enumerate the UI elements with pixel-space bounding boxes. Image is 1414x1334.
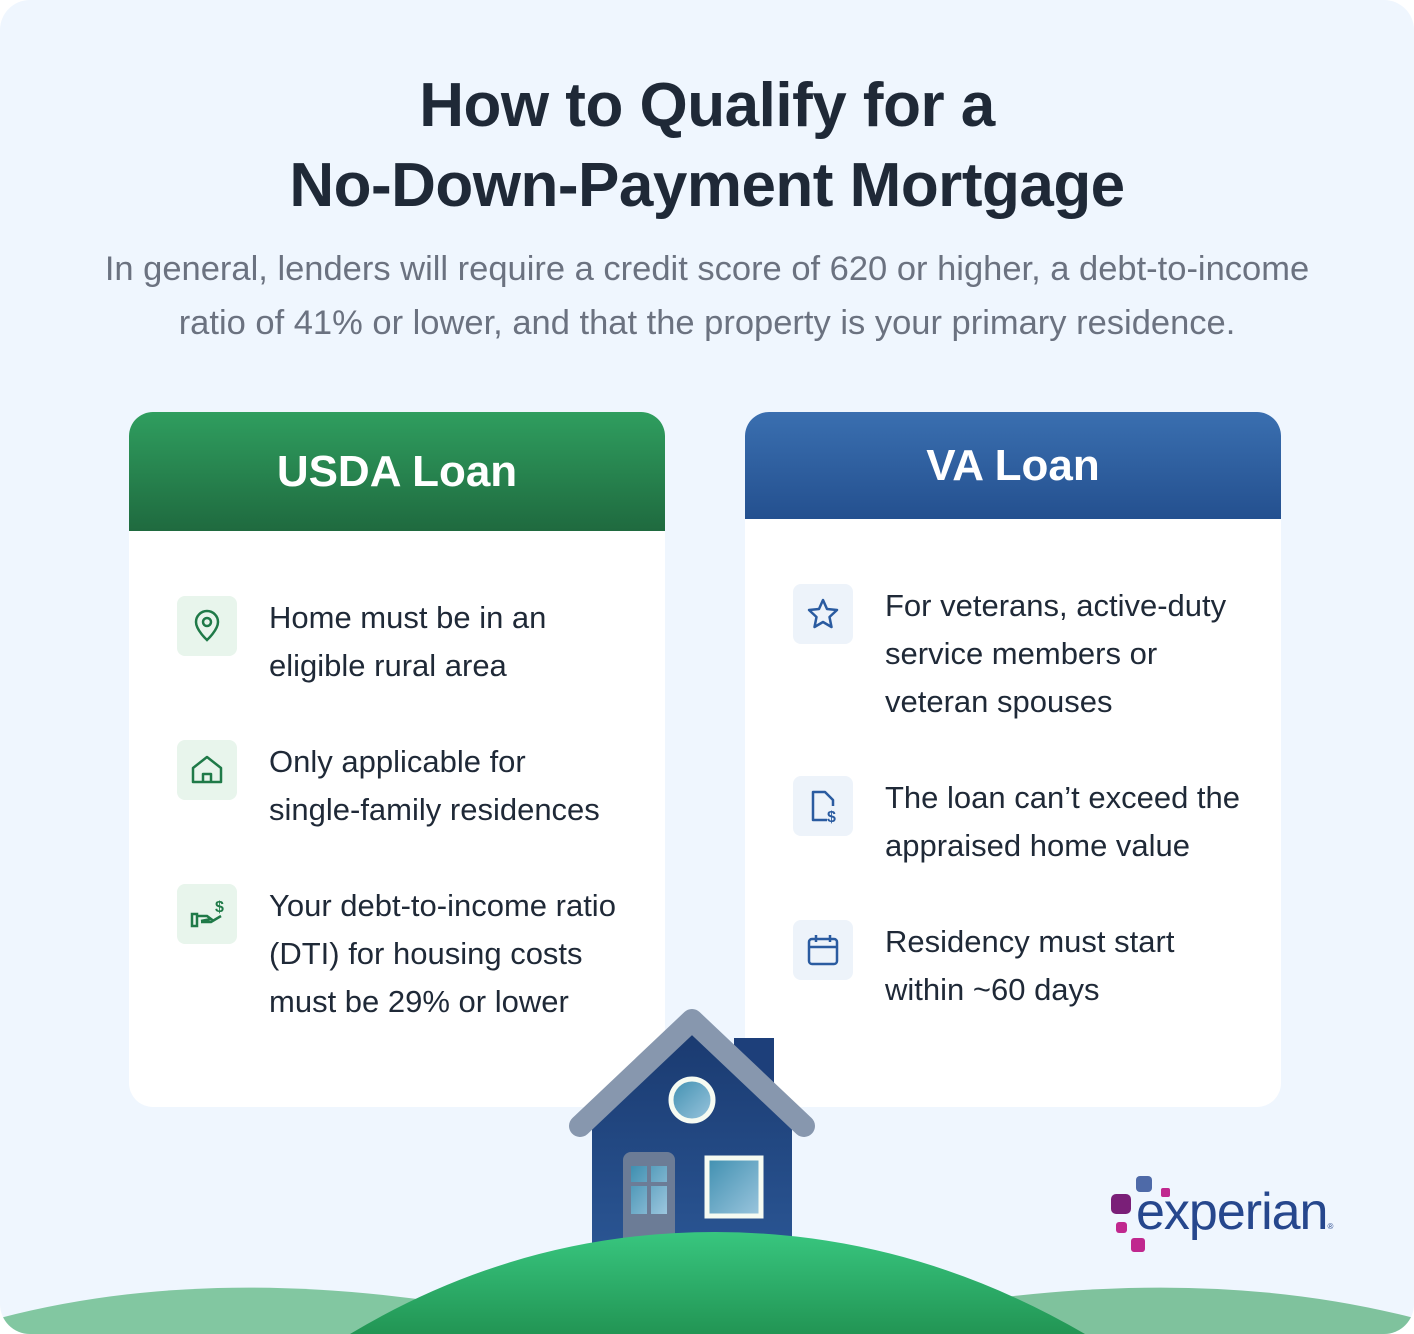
item: rural area: Home must be in an <box>269 600 546 635</box>
panel: VA loan <box>745 412 1281 1107</box>
icon: star <box>793 584 853 644</box>
icon: calendar <box>793 920 853 980</box>
icon: location pin <box>177 596 237 656</box>
icon: document dollar: $ <box>827 809 836 826</box>
item: appraised value <box>793 776 1240 863</box>
heading: USDA Loan: USDA Loan <box>277 447 517 496</box>
item: DTI: Your debt-to-income ratio <box>269 888 616 923</box>
item: veterans: service members or <box>885 636 1157 671</box>
logo: experian <box>1111 1176 1334 1252</box>
house <box>580 1020 804 1252</box>
item: single family <box>177 740 600 827</box>
item: single family: single-family residences <box>269 792 600 827</box>
item: residency <box>793 920 1174 1007</box>
item: rural area: eligible rural area <box>269 648 507 683</box>
item: veterans: veteran spouses <box>885 684 1112 719</box>
subtitle: In general, lenders will require a credit score of 620 or higher, a debt-to-income <box>105 250 1309 288</box>
title <box>289 71 1125 220</box>
item: appraised value: appraised home value <box>885 828 1190 863</box>
main hill <box>350 1232 1085 1334</box>
item: appraised value: The loan can’t exceed the <box>885 780 1240 815</box>
item: veterans <box>793 584 1226 719</box>
item: veterans: For veterans, active-duty <box>885 588 1226 623</box>
subtitle: ratio of 41% or lower, and that the property is your primary residence. <box>179 304 1235 342</box>
heading: VA Loan <box>745 412 1281 519</box>
item: rural area <box>177 596 546 683</box>
subtitle <box>105 250 1309 342</box>
heading: VA Loan: VA Loan <box>926 441 1100 490</box>
panel: USDA loan <box>129 412 665 1107</box>
item: single family: Only applicable for <box>269 744 526 779</box>
side hills <box>0 1288 600 1334</box>
icon: house <box>177 740 237 800</box>
item: DTI: (DTI) for housing costs <box>269 936 583 971</box>
icon: hand with dollar <box>177 884 237 944</box>
item: residency: within ~60 days <box>885 972 1100 1007</box>
heading: USDA Loan <box>129 412 665 531</box>
item: DTI: must be 29% or lower <box>269 984 569 1019</box>
logo: experian: experian® <box>1136 1183 1332 1241</box>
item: DTI <box>177 884 616 1019</box>
icon: document dollar <box>793 776 853 836</box>
item: residency: Residency must start <box>885 924 1174 959</box>
icon: hand with dollar: $ <box>215 899 224 916</box>
title: How to Qualify for a <box>419 71 995 140</box>
title: No-Down-Payment Mortgage <box>289 151 1125 220</box>
